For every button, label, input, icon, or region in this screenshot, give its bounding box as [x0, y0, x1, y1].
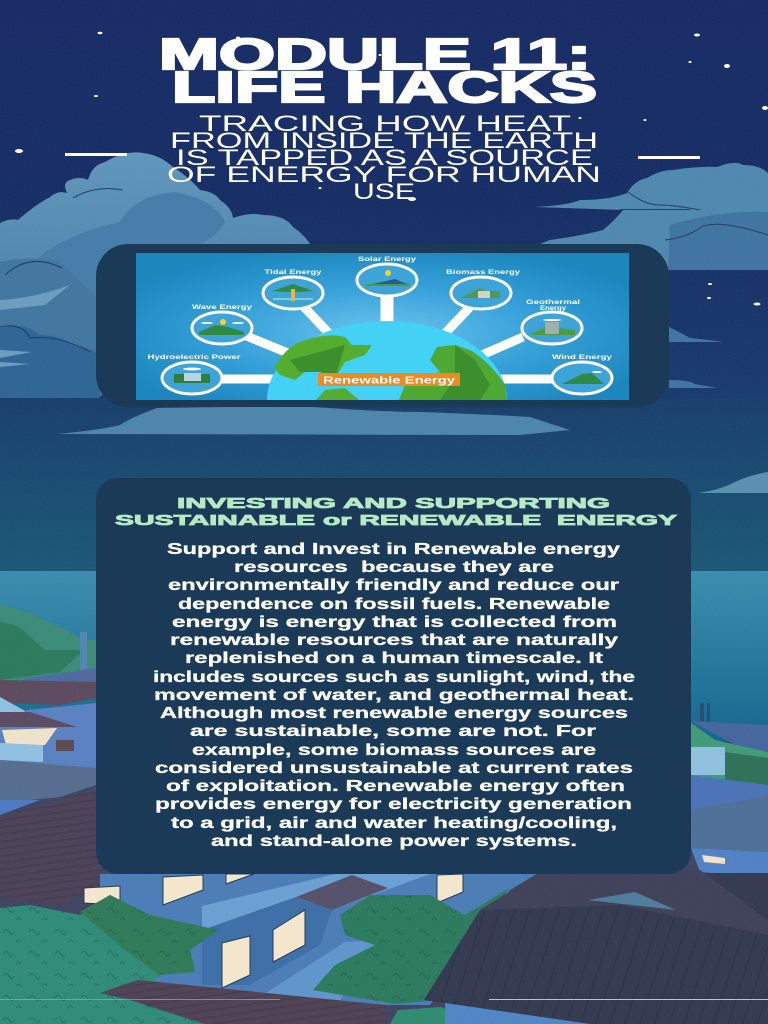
card body text: and stand-alone power systems. [211, 833, 577, 850]
card body text: are sustainable, some are not. For [190, 723, 596, 740]
shore: left houses [0, 668, 120, 905]
card body text: of exploitation. Renewable energy often [166, 778, 625, 795]
foreground: green bushes [0, 888, 509, 1024]
icon: solar energy [357, 256, 417, 296]
stars [15, 32, 768, 306]
icon: tidal energy [263, 269, 323, 309]
label: renewable energy [318, 373, 460, 386]
card body text: includes sources such as sunlight, wind, the [153, 669, 636, 686]
background: sea [0, 571, 768, 741]
card heading: INVESTING AND SUPPORTING [177, 496, 610, 512]
card body text [153, 541, 636, 850]
decorative footer line right [489, 999, 768, 1000]
title: MODULE 11: [159, 30, 591, 79]
card body text: environmentally friendly and reduce our [168, 577, 619, 594]
clouds: left cloud mass [0, 152, 312, 398]
accent dash right [638, 156, 700, 159]
label: renewable energy: Renewable Energy [323, 374, 455, 386]
icon: geothermal energy: Energy [540, 305, 566, 312]
subtitle: USE [353, 179, 415, 204]
foreground: dark roof right [424, 870, 768, 1024]
icon: tidal energy: Tidal Energy [264, 269, 322, 276]
icon: solar energy: Solar Energy [358, 256, 417, 263]
accent dash left [65, 153, 127, 156]
foreground: central blue houses [84, 872, 540, 1005]
panel: investing text card [96, 478, 691, 874]
card body text: resources because they are [234, 559, 555, 576]
background: ground base [0, 741, 768, 1024]
card body text: movement of water, and geothermal heat. [154, 687, 634, 704]
windows [84, 874, 463, 988]
icon: geothermal energy: Geothermal [526, 299, 580, 306]
background: night sky [0, 0, 768, 400]
subtitle [167, 111, 601, 204]
card body text: Although most renewable energy sources [160, 705, 628, 722]
panel: renewable energy image frame [96, 244, 669, 407]
card body text: provides energy for electricity generation [155, 796, 632, 813]
decorative footer line left [0, 999, 280, 1000]
icon: hydroelectric power [148, 354, 241, 394]
shore: right houses [691, 703, 768, 878]
card body text: renewable resources that are naturally [170, 632, 619, 649]
icon: wave energy: Wave Energy [192, 304, 253, 311]
card heading [115, 496, 678, 529]
clouds: small horizon clouds [57, 327, 768, 493]
foreground: brown roof bottom [100, 980, 386, 1024]
icon: hydroelectric power: Hydroelectric Power [148, 354, 241, 361]
clouds: right cloud mass [535, 163, 768, 270]
background: distant water band [0, 398, 768, 572]
subtitle: FROM INSIDE THE EARTH [170, 128, 598, 153]
card body text: dependence on fossil fuels. Renewable [178, 596, 611, 613]
card body text: considered unsustainable at current rates [155, 760, 633, 777]
card body text: replenished on a human timescale. It [185, 650, 603, 667]
icon: biomass energy [446, 269, 521, 309]
subtitle: OF ENERGY FOR HUMAN [167, 162, 601, 187]
card heading: SUSTAINABLE or RENEWABLE ENERGY [115, 513, 678, 529]
subtitle: TRACING HOW HEAT [199, 111, 571, 136]
title: LIFE HACKS [172, 63, 597, 112]
globe [267, 321, 507, 400]
image background [136, 253, 629, 400]
spokes [222, 297, 553, 379]
icon: wind energy [552, 354, 613, 394]
card body text: to a grid, air and water heating/cooling, [171, 815, 617, 832]
title [159, 30, 597, 112]
icon: geothermal energy [522, 299, 582, 344]
icon: biomass energy: Biomass Energy [446, 269, 521, 276]
card body text: Support and Invest in Renewable energy [167, 541, 621, 558]
subtitle: IS TAPPED AS A SOURCE [176, 145, 593, 170]
icon: wave energy [192, 304, 253, 344]
card body text: energy is energy that is collected from [172, 614, 617, 631]
icon: wind energy: Wind Energy [552, 354, 613, 361]
shore: left hills [0, 604, 96, 684]
card body text: example, some biomass sources are [192, 742, 597, 759]
